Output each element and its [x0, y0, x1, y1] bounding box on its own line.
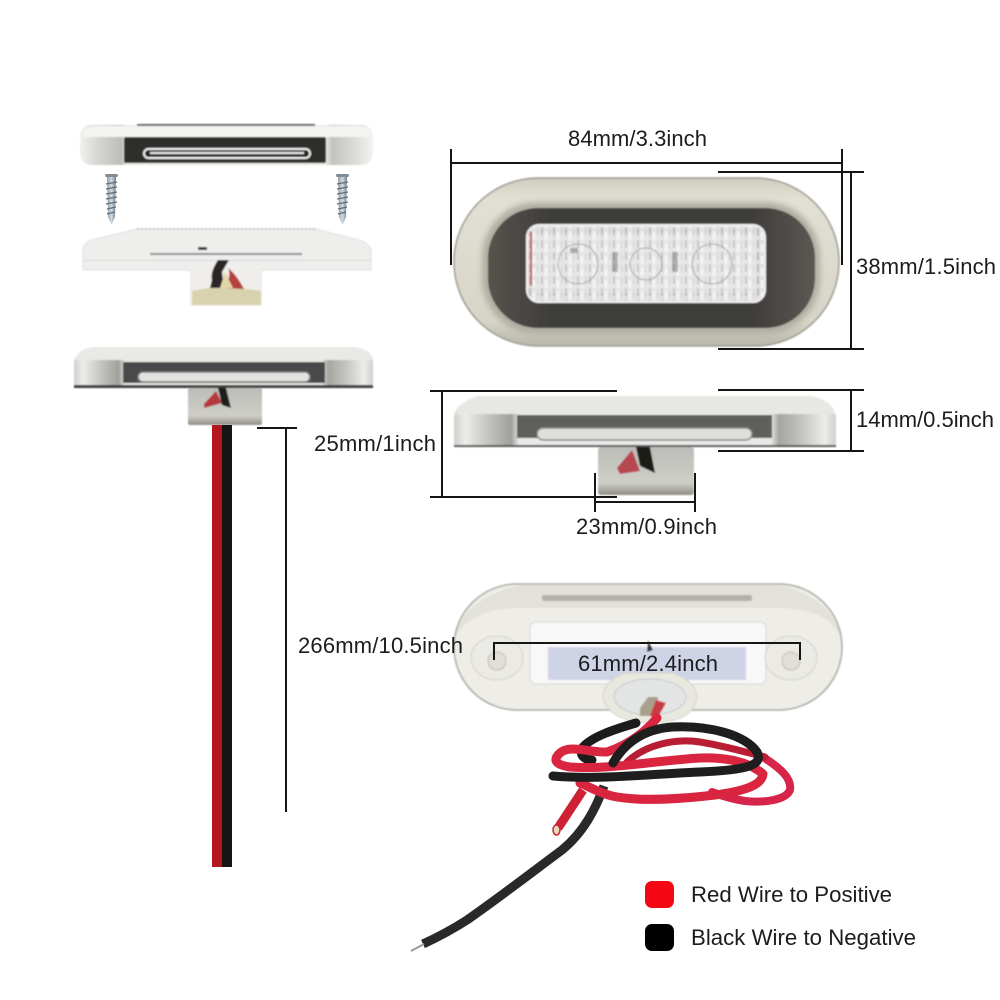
dimension: 84mm length: [451, 126, 842, 265]
icon: left screw: [105, 174, 118, 225]
dimension: 23mm stem width: [576, 473, 717, 539]
exploded view: stainless cover: [80, 124, 373, 165]
dimension: 25mm stem height: [314, 391, 617, 497]
dimension: 84mm length: 84mm/3.3inch: [568, 126, 707, 151]
dimension: 61mm screw spacing: [494, 643, 800, 676]
top view light with lens: [454, 178, 839, 346]
assembled side view, left: [74, 347, 373, 425]
dimension: 14mm thickness: 14mm/0.5inch: [856, 407, 994, 432]
dimension: 266mm wire length: 266mm/10.5inch: [298, 633, 463, 658]
dimension: 38mm width: [718, 172, 996, 349]
icon: right screw: [336, 174, 349, 225]
rear view light: [454, 584, 842, 723]
side view light: [454, 396, 836, 495]
dimension: 266mm wire length: [257, 428, 463, 812]
loop of red and black wires: [411, 718, 790, 951]
dimension: 23mm stem width: 23mm/0.9inch: [576, 514, 717, 539]
dimension: 38mm width: 38mm/1.5inch: [856, 254, 996, 279]
dimension: 25mm stem height: 25mm/1inch: [314, 431, 436, 456]
red and black wires, straight: [212, 425, 232, 867]
exploded view: clear lens with stem: [83, 229, 371, 306]
dimension: 61mm screw spacing: 61mm/2.4inch: [578, 651, 718, 676]
legend: red wire: Red Wire to Positive: [691, 882, 892, 907]
legend: black wire: Black Wire to Negative: [691, 925, 916, 950]
dimension: 14mm thickness: [718, 390, 994, 451]
